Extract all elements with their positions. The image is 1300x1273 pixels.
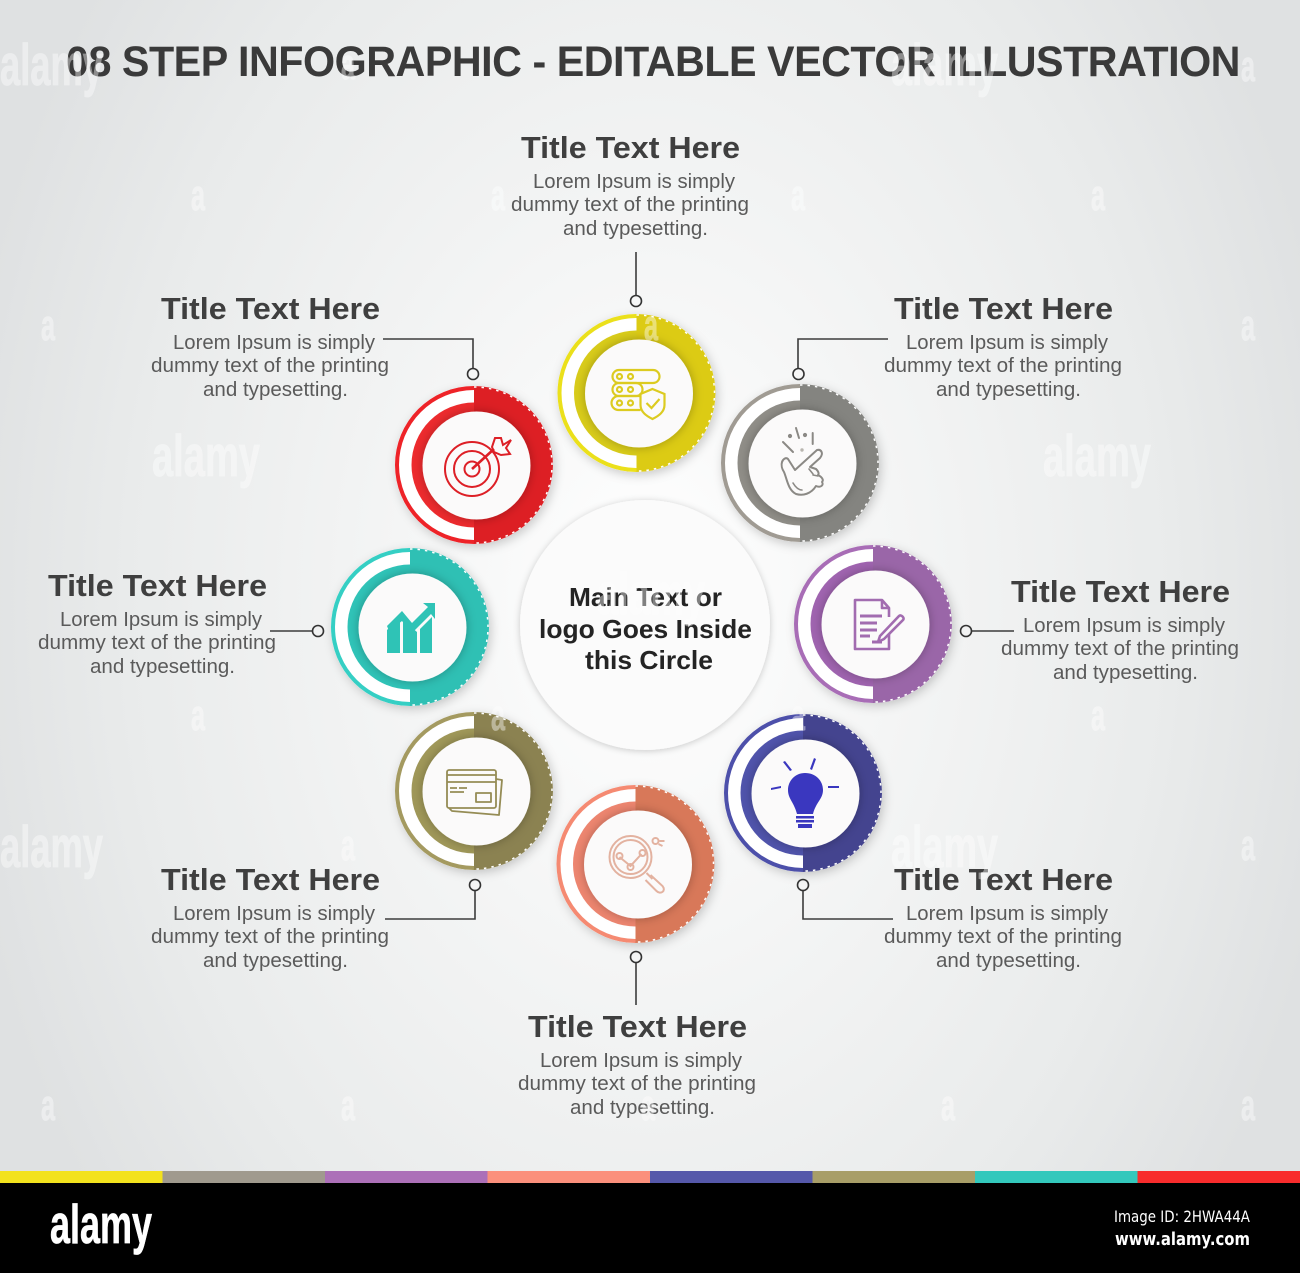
text block: step 2: and typesetting. bbox=[936, 379, 1081, 401]
center circle bbox=[520, 500, 770, 750]
watermarks: alamy bbox=[891, 33, 998, 98]
watermarks: a bbox=[1091, 171, 1105, 220]
icon: magnifier chart bbox=[610, 836, 664, 893]
center circle: this Circle bbox=[585, 645, 713, 675]
text block: step 3: Title Text Here bbox=[1011, 574, 1230, 609]
step 3: purple badge bbox=[794, 545, 952, 703]
text block: step 8: and typesetting. bbox=[203, 379, 348, 401]
text block: step 1: and typesetting. bbox=[563, 218, 708, 240]
icon: credit cards bbox=[447, 770, 502, 815]
icon: finger snap bbox=[782, 428, 823, 495]
watermarks: a bbox=[1241, 1081, 1255, 1130]
connector: step 2 bbox=[793, 339, 888, 380]
watermarks: a bbox=[1241, 42, 1255, 91]
text block: step 8: dummy text of the printing bbox=[151, 355, 389, 377]
step 1: yellow badge bbox=[558, 314, 716, 472]
text block: step 4: Lorem Ipsum is simply bbox=[906, 903, 1108, 925]
text block: step 3: and typesetting. bbox=[1053, 662, 1198, 684]
watermarks: a bbox=[1241, 821, 1255, 870]
footer bar: www.alamy.com bbox=[1115, 1229, 1250, 1250]
watermarks: alamy bbox=[597, 562, 705, 627]
watermarks: a bbox=[341, 821, 355, 870]
watermarks: alamy bbox=[0, 815, 103, 880]
icon: server shield bbox=[612, 370, 664, 419]
text block: step 7: and typesetting. bbox=[90, 656, 235, 678]
text block: step 3: dummy text of the printing bbox=[1001, 638, 1239, 660]
text block: step 5 bbox=[518, 1009, 756, 1119]
text block: step 1: dummy text of the printing bbox=[511, 194, 749, 216]
text block: step 5: Title Text Here bbox=[528, 1009, 747, 1044]
text block: step 7: dummy text of the printing bbox=[38, 632, 276, 654]
text block: step 4: Title Text Here bbox=[894, 862, 1113, 897]
text block: step 6: Title Text Here bbox=[161, 862, 380, 897]
watermarks: a bbox=[341, 1081, 355, 1130]
text block: step 1: Lorem Ipsum is simply bbox=[533, 171, 735, 193]
title: 08 STEP INFOGRAPHIC - EDITABLE VECTOR ILLUSTRATION bbox=[66, 38, 1240, 86]
text block: step 5: and typesetting. bbox=[570, 1097, 715, 1119]
footer bar: alamy bbox=[50, 1193, 152, 1255]
step 7: teal badge bbox=[331, 548, 489, 706]
text block: step 7 bbox=[38, 568, 276, 678]
icon: document and pen bbox=[855, 600, 904, 649]
connector: step 6 bbox=[385, 880, 480, 919]
step 2: gray badge bbox=[721, 384, 879, 542]
text block: step 4: and typesetting. bbox=[936, 950, 1081, 972]
connector: step 3 bbox=[960, 626, 1014, 636]
watermarks: alamy bbox=[1043, 424, 1151, 489]
text block: step 3: Lorem Ipsum is simply bbox=[1023, 615, 1225, 637]
watermarks: a bbox=[41, 301, 55, 350]
connector: step 4 bbox=[798, 880, 893, 919]
text block: step 8: Title Text Here bbox=[161, 291, 380, 326]
icon: light bulb bbox=[771, 758, 839, 828]
watermarks: a bbox=[191, 691, 205, 740]
watermarks: a bbox=[341, 40, 355, 89]
text block: step 1 bbox=[511, 130, 749, 240]
color stripe bbox=[0, 1171, 1300, 1183]
step 5: coral badge bbox=[556, 785, 714, 943]
footer bar: Image ID: 2HWA44A bbox=[1114, 1207, 1250, 1226]
icon: growth chart bbox=[387, 603, 435, 653]
step 4: navy badge bbox=[724, 714, 882, 872]
text block: step 6 bbox=[151, 862, 389, 972]
watermarks: a bbox=[191, 171, 205, 220]
text block: step 6: dummy text of the printing bbox=[151, 926, 389, 948]
watermarks: a bbox=[791, 691, 805, 740]
text block: step 5: Lorem Ipsum is simply bbox=[540, 1050, 742, 1072]
watermarks: alamy bbox=[152, 424, 260, 489]
center circle: Main Text or bbox=[569, 582, 722, 612]
watermarks: a bbox=[791, 171, 805, 220]
footer bar bbox=[0, 1183, 1300, 1273]
text block: step 2: Title Text Here bbox=[894, 291, 1113, 326]
text block: step 4: dummy text of the printing bbox=[884, 926, 1122, 948]
watermarks: alamy bbox=[0, 33, 103, 98]
text block: step 8: Lorem Ipsum is simply bbox=[173, 332, 375, 354]
text block: step 2: dummy text of the printing bbox=[884, 355, 1122, 377]
watermarks: a bbox=[941, 1081, 955, 1130]
step 8: red badge bbox=[395, 386, 553, 544]
text block: step 5: dummy text of the printing bbox=[518, 1073, 756, 1095]
step 6: olive badge bbox=[395, 712, 553, 870]
connector: step 5 bbox=[630, 952, 642, 1005]
watermarks: a bbox=[641, 1081, 655, 1130]
watermarks: alamy bbox=[891, 815, 998, 880]
watermarks: a bbox=[491, 171, 505, 220]
connector: step 7 bbox=[270, 626, 324, 636]
text block: step 2 bbox=[884, 291, 1122, 401]
icon: target and arrow bbox=[445, 438, 511, 496]
connector: step 8 bbox=[383, 339, 478, 380]
text block: step 1: Title Text Here bbox=[521, 130, 740, 165]
text block: step 8 bbox=[151, 291, 389, 401]
watermarks: a bbox=[644, 301, 658, 350]
watermarks: a bbox=[1241, 301, 1255, 350]
text block: step 6: and typesetting. bbox=[203, 950, 348, 972]
text block: step 7: Title Text Here bbox=[48, 568, 267, 603]
text block: step 2: Lorem Ipsum is simply bbox=[906, 332, 1108, 354]
watermarks: a bbox=[491, 691, 505, 740]
text block: step 7: Lorem Ipsum is simply bbox=[60, 609, 262, 631]
watermarks: a bbox=[1091, 691, 1105, 740]
text block: step 4 bbox=[884, 862, 1122, 972]
watermarks: a bbox=[41, 1081, 55, 1130]
center circle: logo Goes Inside bbox=[539, 614, 752, 644]
text block: step 6: Lorem Ipsum is simply bbox=[173, 903, 375, 925]
text block: step 3 bbox=[1001, 574, 1239, 684]
connector: step 1 bbox=[630, 252, 642, 306]
